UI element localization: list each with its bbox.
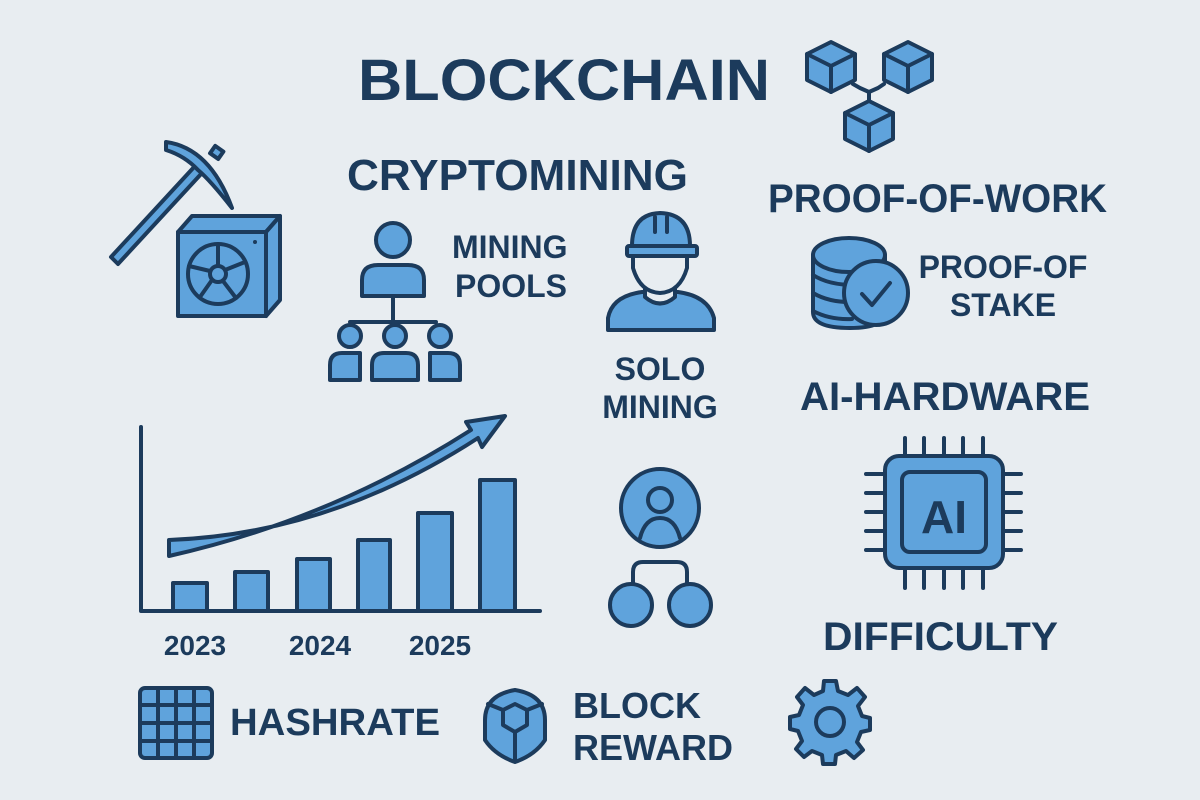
- label: proof-of-stake: [919, 249, 1087, 323]
- label: mining pools: [452, 229, 568, 304]
- label: solo mining: MINING: [602, 389, 718, 425]
- label: block reward: REWARD: [573, 727, 733, 768]
- label: proof-of-stake: STAKE: [950, 287, 1056, 323]
- icon: mining pools: [330, 223, 460, 380]
- bar chart: growth: [141, 416, 540, 611]
- axis labels: years: 2023: [164, 630, 226, 661]
- title: BLOCKCHAIN: [358, 48, 770, 113]
- heading: difficulty: DIFFICULTY: [823, 615, 1058, 659]
- label: proof-of-stake: PROOF-OF: [919, 249, 1087, 285]
- icon: solo miner: [608, 213, 714, 330]
- icon: proof-of-stake coins: [813, 238, 908, 328]
- heading: cryptomining: CRYPTOMINING: [347, 151, 688, 200]
- icon: block reward shield: [485, 690, 545, 762]
- heading: ai-hardware: AI-HARDWARE: [800, 375, 1090, 419]
- icon: pickaxe and mining rig: [111, 142, 280, 316]
- icon: hashrate grid: [140, 688, 212, 758]
- icon: blockchain cubes: [807, 42, 932, 151]
- arrow: trend: [169, 416, 505, 556]
- label: solo mining: SOLO: [615, 351, 705, 387]
- axis labels: years: 2025: [409, 630, 471, 661]
- axis labels: years: [164, 630, 471, 661]
- label: solo mining: [602, 351, 718, 425]
- label: block reward: [573, 685, 733, 768]
- label: block reward: BLOCK: [573, 685, 701, 726]
- axis labels: years: 2024: [289, 630, 352, 661]
- icon: AI chip: [866, 438, 1021, 588]
- label: hashrate: HASHRATE: [230, 702, 440, 744]
- icon: user network: [610, 469, 711, 626]
- icon: AI chip: AI: [921, 491, 967, 543]
- heading: proof-of-work: PROOF-OF-WORK: [768, 177, 1107, 221]
- label: mining pools: MINING: [452, 229, 568, 265]
- icon: gear: [790, 681, 870, 764]
- label: mining pools: POOLS: [455, 268, 567, 304]
